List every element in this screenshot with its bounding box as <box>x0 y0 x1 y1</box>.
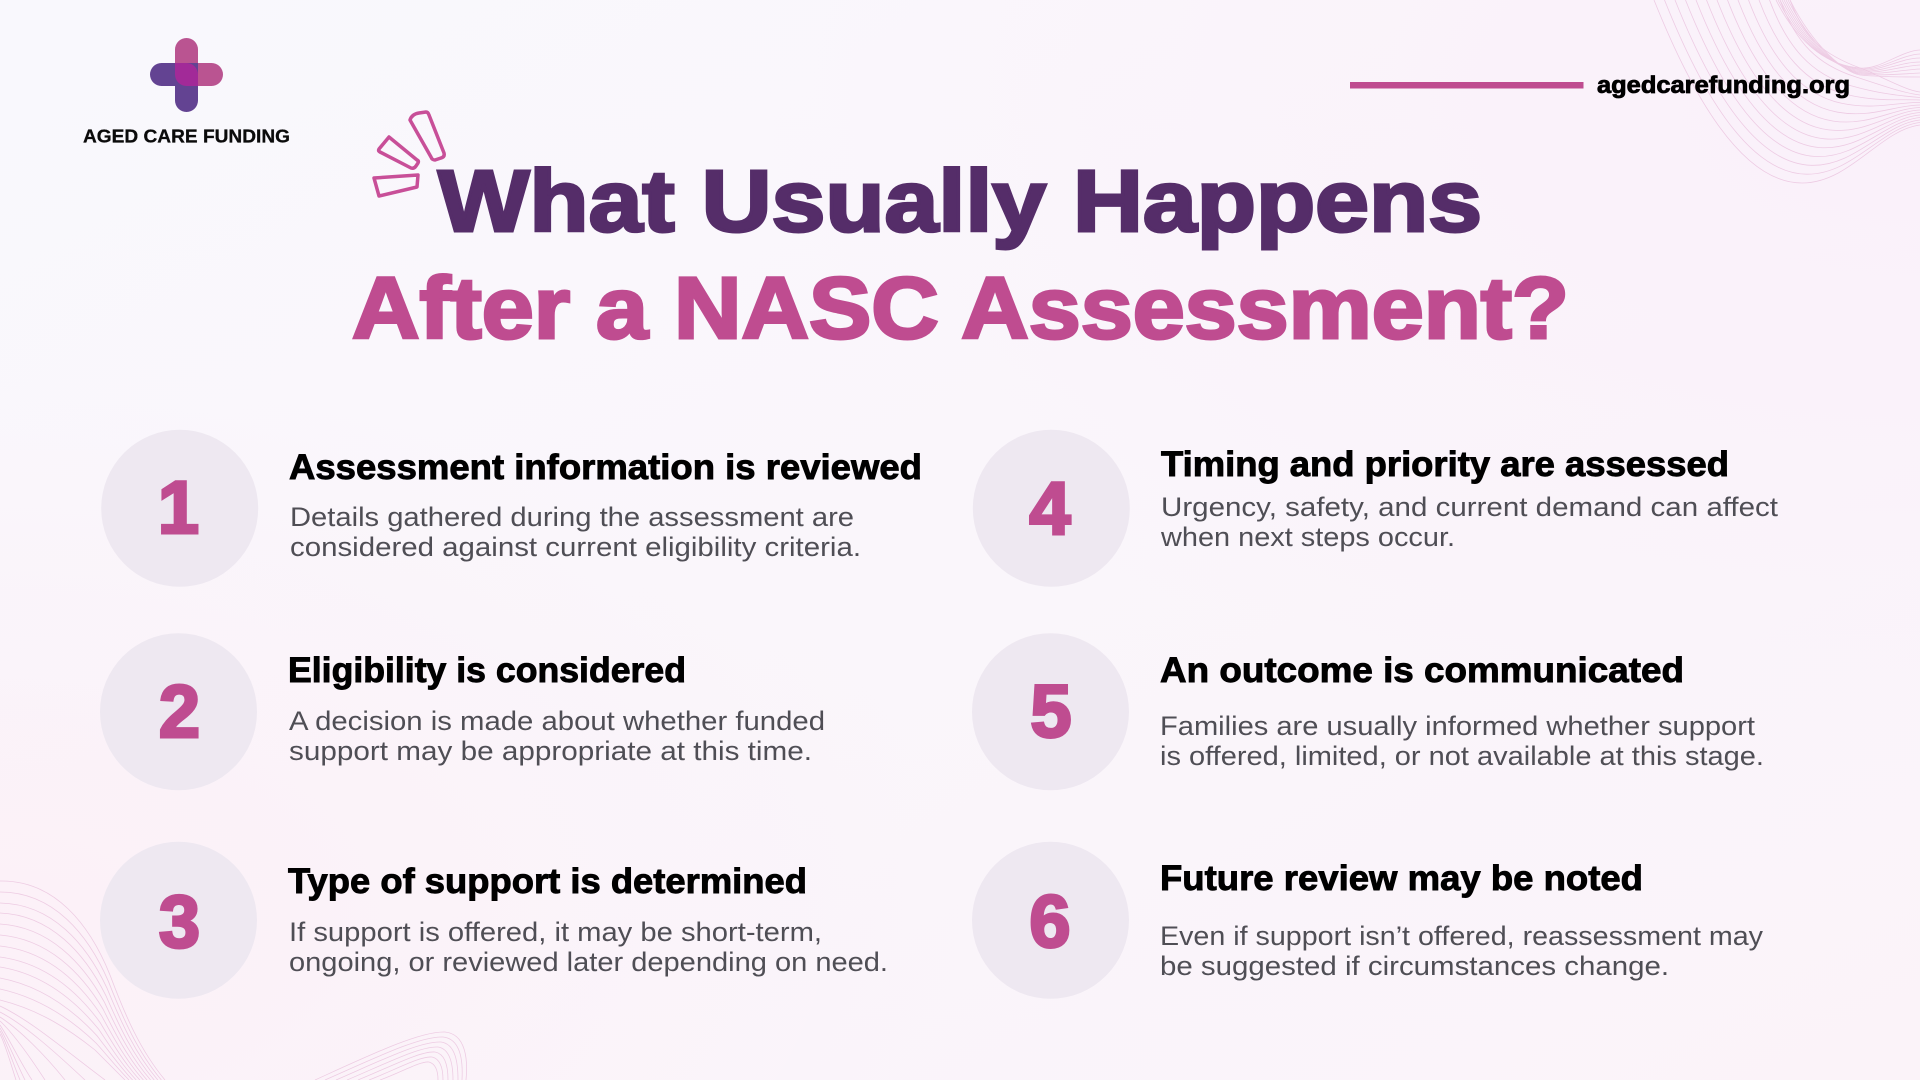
step 3: Type of support is determined <box>288 862 807 901</box>
step 5: is offered, limited, or not available at this stage. <box>1160 741 1764 771</box>
step 4: 4 <box>1029 467 1071 550</box>
step 1: considered against current eligibility criteria. <box>290 532 861 562</box>
step 5: An outcome is communicated <box>1160 651 1684 690</box>
step 5 <box>972 633 1764 790</box>
step 6: be suggested if circumstances change. <box>1160 951 1669 981</box>
title <box>352 153 1569 357</box>
step 1: 1 <box>158 466 199 549</box>
decorative wave: bottom centre-left <box>315 1032 467 1080</box>
step 6 <box>972 842 1764 999</box>
step 2: Eligibility is considered <box>288 651 686 690</box>
step 6: Future review may be noted <box>1160 859 1643 898</box>
step 2: 2 <box>159 670 200 753</box>
step 3: 3 <box>159 880 200 963</box>
website line and address <box>1350 72 1850 99</box>
step 2 <box>100 633 825 790</box>
title: After a NASC Assessment? <box>352 260 1569 357</box>
step 6: Even if support isn’t offered, reassessment may <box>1160 921 1764 951</box>
icon: sparkle accent <box>374 112 444 196</box>
step 4: Timing and priority are assessed <box>1161 445 1729 484</box>
step 3 <box>100 842 888 999</box>
logo wordmark: AGED CARE FUNDING <box>83 126 290 146</box>
step 5: 5 <box>1030 670 1072 753</box>
step 3: ongoing, or reviewed later depending on need. <box>289 947 888 977</box>
decorative wave: top right <box>1654 0 1920 183</box>
step 1: Details gathered during the assessment are <box>290 502 854 532</box>
step 3: If support is offered, it may be short-term, <box>289 917 822 947</box>
icon: medical cross <box>150 38 223 112</box>
step 4: when next steps occur. <box>1160 522 1455 552</box>
step 2: support may be appropriate at this time. <box>289 736 812 766</box>
step 4 <box>973 430 1779 587</box>
step 2: A decision is made about whether funded <box>289 706 825 736</box>
logo: Aged Care Funding <box>83 38 290 146</box>
title: What Usually Happens <box>438 153 1482 250</box>
step 4: Urgency, safety, and current demand can affect <box>1161 492 1779 522</box>
step 6: 6 <box>1029 880 1071 963</box>
decorative wave: bottom left <box>0 881 165 1080</box>
website line and address: agedcarefunding.org <box>1597 72 1850 99</box>
step 5: Families are usually informed whether support <box>1160 711 1756 741</box>
step 1 <box>101 430 922 587</box>
step 1: Assessment information is reviewed <box>289 448 922 487</box>
